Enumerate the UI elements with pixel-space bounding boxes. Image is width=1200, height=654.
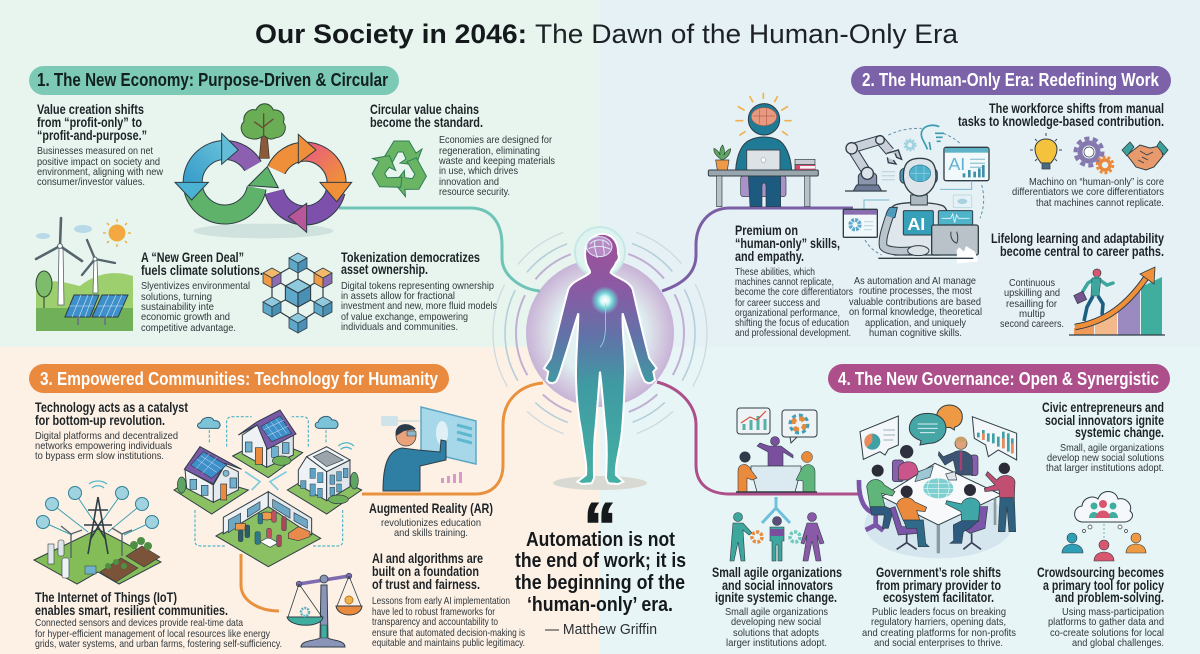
three people xyxy=(730,512,824,561)
text block: internet of things: for hyper-efficient management of local resources like energy xyxy=(35,629,271,640)
text block: government's role: regulatory harriers, opening dats, xyxy=(871,617,1006,628)
head aura xyxy=(575,227,625,277)
title: The Dawn of the Human-Only Era xyxy=(535,19,959,49)
text block: tokenization: in assets allow for fractional xyxy=(341,291,455,302)
text block: value creation: Businesses measured on net xyxy=(37,146,153,157)
bulb xyxy=(1035,139,1057,163)
text block: premium skills: and empathy. xyxy=(735,249,804,264)
quote: Automation is not xyxy=(526,528,675,551)
text block: AI and algorithms: built on a foundation xyxy=(372,564,479,579)
shadow xyxy=(193,224,333,238)
connector: orange to panel 3 xyxy=(362,383,543,494)
text block: green deal: fuels climate solutions. xyxy=(141,263,263,278)
left window xyxy=(864,200,889,209)
text block: augmented reality: and skills training. xyxy=(394,528,468,539)
text block: small agile organizations: Small agile organizations xyxy=(725,607,828,618)
text block: civic entrepreneurs: develop new social solutions xyxy=(1047,453,1164,464)
text block: catalyst: Technology acts as a catalyst xyxy=(35,400,188,415)
brain xyxy=(587,237,612,258)
right person xyxy=(802,452,812,462)
text block: premium skills: shifting the focus of education xyxy=(735,318,849,329)
chest AI screen xyxy=(903,211,933,235)
text: machino body xyxy=(1012,177,1164,209)
text block: tokenization: Digital tokens representing ownership xyxy=(341,281,494,292)
text block: value creation: Value creation shifts xyxy=(37,102,144,117)
turbine 2 xyxy=(82,240,115,293)
text block: civic entrepreneurs xyxy=(1042,400,1164,474)
text: lifelong learning: resailling for xyxy=(1006,299,1057,310)
table xyxy=(751,466,801,492)
text: circular value chains body: innovation and xyxy=(439,177,499,188)
text: circular value chains body: waste and keeping materials xyxy=(438,156,555,167)
solar panels xyxy=(65,295,99,317)
text block: tokenization: individuals and communities. xyxy=(341,322,458,333)
text block: premium skills: Premium on xyxy=(735,223,798,238)
speech bubbles xyxy=(937,405,962,430)
chairs back xyxy=(892,460,904,482)
text block: premium skills: and professional development. xyxy=(735,328,851,339)
text block: augmented reality: revolutionizes education xyxy=(381,518,481,529)
text block: catalyst: networks empowering individuals xyxy=(35,441,172,452)
connector lines xyxy=(940,181,972,189)
text block: internet of things: The Internet of Things (IoT) xyxy=(35,590,177,605)
desk xyxy=(708,170,818,176)
text block: catalyst: Digital platforms and decentralized xyxy=(35,431,178,442)
text block: AI and algorithms: transparency and accountability to xyxy=(372,617,498,628)
text block: premium skills xyxy=(735,223,853,339)
green man left xyxy=(859,480,883,531)
text: circular value chains heading xyxy=(370,102,483,130)
heading pill 4 xyxy=(828,364,1170,393)
text block: civic entrepreneurs: social innovators ignite xyxy=(1045,413,1164,428)
heading pill 1: 1. The New Economy: Purpose-Driven & Circular xyxy=(37,70,388,90)
connector: teal to panel 1 xyxy=(339,208,540,291)
text block: crowdsourcing: Crowdsourcing becomes xyxy=(1037,565,1164,580)
bars bubble xyxy=(972,417,1017,460)
office building xyxy=(287,443,362,514)
text block: augmented reality: Augmented Reality (AR) xyxy=(369,501,493,516)
text block: premium skills: These abilities, which xyxy=(735,267,815,278)
icon: crowdsourcing cloud xyxy=(1062,491,1146,561)
text block: civic entrepreneurs: Civic entrepreneurs and xyxy=(1042,400,1164,415)
concentric arcs xyxy=(493,226,707,440)
icon: recycle xyxy=(366,141,432,201)
icon: smart neighbourhood xyxy=(174,410,362,575)
panel 2: the human-only era xyxy=(708,66,1171,339)
text block: tokenization: investment and new, more fluid models xyxy=(341,301,497,312)
icon: token cube network xyxy=(263,253,332,333)
text: circular value chains body: in use, which drives xyxy=(439,166,518,177)
icon: IoT smart farm xyxy=(34,481,161,584)
woman pink xyxy=(900,445,913,458)
tree xyxy=(43,285,45,308)
text block: premium skills: become the core differentiators xyxy=(735,287,853,298)
text block: internet of things: Connected sensors and devices provide real-time data xyxy=(35,618,243,629)
title: Our Society in 2046: xyxy=(255,19,527,49)
text block: automation: As automation and AI manage xyxy=(854,276,976,287)
turbine 1 xyxy=(36,218,82,305)
left person xyxy=(740,452,750,462)
legs xyxy=(748,176,781,207)
text block: crowdsourcing: and problem-solving. xyxy=(1055,590,1164,605)
text: lifelong learning: multip xyxy=(1019,309,1045,320)
text block: civic entrepreneurs: Small, agile organizations xyxy=(1060,443,1164,454)
central human figure xyxy=(493,226,707,490)
icon: rising arrow with climbing person xyxy=(1069,267,1165,335)
chair xyxy=(741,176,786,197)
community room xyxy=(216,492,321,575)
text block: government's role: ecosystem facilitator. xyxy=(883,590,994,605)
energy sphere xyxy=(526,259,674,407)
text block: value creation: positive impact on society and xyxy=(37,157,160,168)
quote: ‘human-only’ era. xyxy=(527,593,673,616)
text block: tokenization xyxy=(341,250,497,333)
text: lifelong learning: Continuous xyxy=(1009,278,1055,289)
text block: green deal: economic growth and xyxy=(141,312,230,323)
branching arrow xyxy=(762,497,790,523)
text block: small agile organizations: ignite systemic change. xyxy=(715,590,837,605)
text block: small agile organizations xyxy=(712,565,842,649)
presenter xyxy=(770,436,780,446)
text block: AI and algorithms: have led to robust frameworks for xyxy=(372,607,495,618)
quote mark: “ xyxy=(584,489,616,563)
heading pill 2 xyxy=(851,66,1171,95)
icons: bulb, gears, handshake xyxy=(1030,133,1168,173)
text block: crowdsourcing: co-create solutions for local xyxy=(1050,628,1164,639)
text block: government's role: Government’s role shifts xyxy=(876,565,1001,580)
robot arm xyxy=(845,136,902,191)
plant xyxy=(714,145,731,160)
bulb bubble and gear xyxy=(921,125,944,150)
text block: automation: application, and uniquely xyxy=(865,318,967,329)
climbing person xyxy=(1093,269,1101,277)
text block: value creation: “profit-and-purpose.” xyxy=(37,128,147,143)
text block: premium skills: “human-only” skills, xyxy=(735,236,840,251)
text block: catalyst xyxy=(35,400,188,462)
robot torso and arm xyxy=(884,203,948,255)
body silhouette xyxy=(544,234,657,484)
text block: automation: routine processes, the most xyxy=(859,286,972,297)
text: workforce heading xyxy=(958,101,1164,129)
pie bubble xyxy=(860,416,898,459)
text block: green deal: A “New Green Deal” xyxy=(141,250,244,265)
icon: balance scales xyxy=(287,573,362,647)
hand xyxy=(957,246,978,263)
icon: wind turbines and solar panels xyxy=(36,218,133,331)
quote: the beginning of the xyxy=(515,571,685,594)
AI window xyxy=(944,147,989,181)
text block: green deal: Slyentivizes environmental xyxy=(141,281,250,292)
text: circular value chains body: regeneration, eliminating xyxy=(439,146,540,157)
icon: infinity loop with tree xyxy=(175,104,352,238)
text block: crowdsourcing: a primary tool for policy xyxy=(1043,578,1164,593)
text block: tokenization: of value exchange, empowering xyxy=(341,312,468,323)
ground shadow xyxy=(553,476,647,490)
panel 4: the new governance xyxy=(712,364,1170,649)
globe xyxy=(923,478,953,498)
text block: green deal xyxy=(141,250,263,334)
text block: small agile organizations: developing new social xyxy=(731,617,821,628)
text block: catalyst: to bypass erm slow institutions. xyxy=(35,451,164,462)
text block: internet of things: grids, water systems, and urban farms, fostering self-sufficiency. xyxy=(35,639,282,650)
text: machino body: Machino on “human-only” is core xyxy=(1029,177,1164,188)
suited man xyxy=(955,437,967,449)
gears xyxy=(1080,143,1098,161)
links xyxy=(195,417,343,546)
text block: tokenization: asset ownership. xyxy=(341,262,428,277)
connector: purple to panel 2 xyxy=(662,208,853,291)
books xyxy=(795,159,815,165)
heading pill 1 xyxy=(29,66,399,95)
text block: green deal: solutions, turning xyxy=(141,292,212,303)
text block: government's role: Public leaders focus on breaking xyxy=(872,607,1006,618)
text block: value creation xyxy=(37,102,163,188)
handshake xyxy=(1127,145,1163,170)
text block: small agile organizations: solutions that adopts xyxy=(733,628,819,639)
dashed orbit xyxy=(865,128,984,255)
tree xyxy=(241,104,285,158)
table xyxy=(882,463,1002,525)
text: circular value chains body: Economies are designed for xyxy=(439,135,552,146)
icon: small team meeting xyxy=(730,408,824,561)
icon: AR user and screen xyxy=(381,407,476,491)
text block: government's role xyxy=(862,565,1016,649)
text block: small agile organizations: larger institutions adopt. xyxy=(726,638,827,649)
robot head xyxy=(900,168,937,183)
connector: magenta to panel 4 xyxy=(657,382,862,494)
text block: small agile organizations: and social innovators xyxy=(722,578,833,593)
teal man xyxy=(965,507,988,533)
text block: crowdsourcing xyxy=(1037,565,1164,649)
text block: value creation: environment, aligning with new xyxy=(37,167,163,178)
quote: the end of work; it is xyxy=(515,549,686,572)
text block: value creation: consumer/investor values. xyxy=(37,177,145,188)
laptop xyxy=(932,225,978,255)
text: circular value chains heading: Circular value chains xyxy=(370,102,479,117)
orange man xyxy=(890,507,920,535)
text: lifelong learning: upskilling and xyxy=(1004,288,1060,299)
connector: orange to scales xyxy=(241,554,279,611)
text block: catalyst: for bottom-up revolution. xyxy=(35,413,165,428)
text block: AI and algorithms: ensure that automated decision-making is xyxy=(372,628,525,639)
text block: crowdsourcing: Using mass-participation xyxy=(1062,607,1164,618)
icon: person at desk xyxy=(708,93,818,207)
text: machino body: that machines cannot replicate. xyxy=(1036,198,1164,209)
text block: automation xyxy=(849,276,982,339)
standing man right xyxy=(999,463,1010,474)
cloud right xyxy=(315,416,338,428)
panel 1: the new economy xyxy=(29,66,555,334)
left house xyxy=(174,447,248,514)
text block: AI and algorithms: AI and algorithms are xyxy=(372,551,483,566)
text: lifelong learning xyxy=(991,231,1164,330)
panel 3: empowered communities xyxy=(29,364,525,650)
text block: crowdsourcing: and global challenges. xyxy=(1072,638,1164,649)
text: circular value chains heading: become the standard. xyxy=(370,115,483,130)
text block: government's role: and social enterprises to thrive. xyxy=(874,638,1003,649)
text: circular value chains body xyxy=(438,135,555,198)
heart glow xyxy=(591,286,619,314)
text block: AI and algorithms: Lessons from early AI implementation xyxy=(372,596,510,607)
text block: automation: on formal knowledge, theoretical xyxy=(849,307,982,318)
text: machino body: differentiators we core differentiators xyxy=(1012,187,1164,198)
text block: green deal: sustainability inte xyxy=(141,302,214,313)
text block: augmented reality xyxy=(369,501,493,539)
text: lifelong learning: become central to career paths. xyxy=(1000,244,1164,259)
text block: premium skills: machines cannot replicate, xyxy=(735,277,834,288)
icon: robot and AI interfaces xyxy=(843,125,989,263)
text block: green deal: competitive advantage. xyxy=(141,323,236,334)
text block: civic entrepreneurs: systemic change. xyxy=(1075,425,1164,440)
quote xyxy=(515,489,686,638)
heading pill 3 xyxy=(29,364,449,393)
title xyxy=(255,19,959,49)
top house xyxy=(233,410,303,478)
text block: automation: valuable contributions are based xyxy=(849,297,981,308)
text block: AI and algorithms xyxy=(372,551,525,649)
text block: crowdsourcing: platforms to gather data and xyxy=(1048,617,1164,628)
icon: roundtable meeting xyxy=(859,405,1017,558)
AI window: AI xyxy=(948,154,965,174)
text block: premium skills: organizational performance, xyxy=(735,308,840,319)
text block: government's role: and creating platforms for non-profits xyxy=(862,628,1016,639)
text block: internet of things: enables smart, resilient communities. xyxy=(35,603,228,618)
text block: value creation: from “profit-only” to xyxy=(37,115,142,130)
text block: small agile organizations: Small agile organizations xyxy=(712,565,842,580)
text block: automation: human cognitive skills. xyxy=(869,328,962,339)
text block: tokenization: Tokenization democratizes xyxy=(341,250,480,265)
text: lifelong learning: second careers. xyxy=(1000,319,1064,330)
text block: internet of things xyxy=(35,590,282,650)
quote: — Matthew Griffin xyxy=(545,621,657,638)
text block: AI and algorithms: equitable and maintains public legitimacy. xyxy=(372,638,525,649)
text block: premium skills: for career success and xyxy=(735,298,820,309)
text: circular value chains body: resource security. xyxy=(439,187,510,198)
text block: civic entrepreneurs: that larger institutions adopt. xyxy=(1046,463,1164,474)
chest AI screen: AI xyxy=(907,214,925,234)
heading pill 3: 3. Empowered Communities: Technology for Humanity xyxy=(40,369,438,389)
text block: government's role: from primary provider to xyxy=(876,578,1001,593)
cloud left xyxy=(198,417,220,428)
text block: AI and algorithms: of trust and fairness. xyxy=(372,577,480,592)
laptop xyxy=(915,466,933,482)
